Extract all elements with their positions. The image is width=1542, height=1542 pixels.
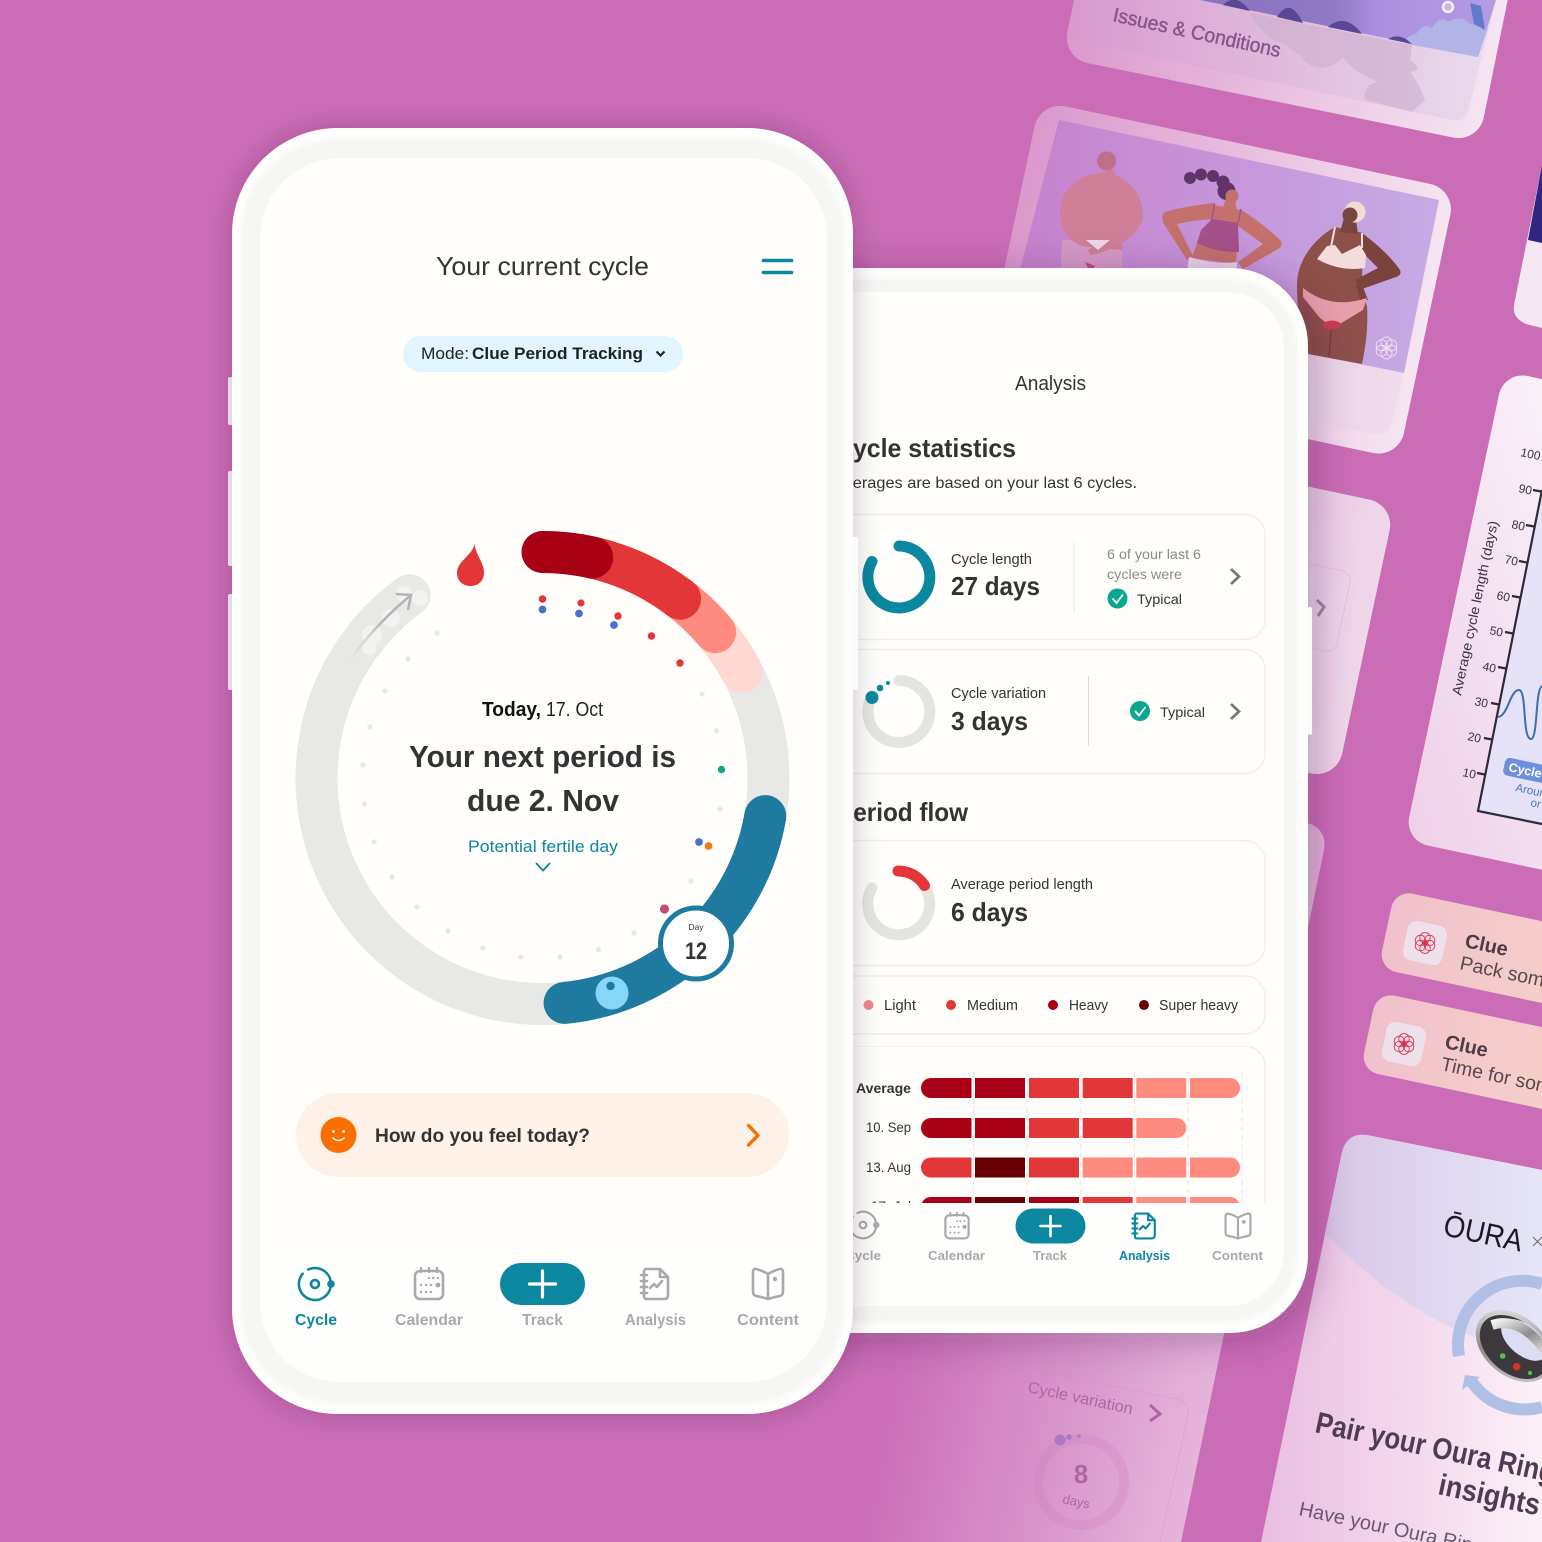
icon: oura ring	[1462, 1295, 1542, 1397]
row: 13 aug	[866, 1158, 1240, 1178]
notification title: Clue	[1443, 1031, 1490, 1062]
label: around: or	[1529, 797, 1542, 811]
nav: content	[737, 1269, 799, 1329]
card: behind right phone	[926, 418, 1395, 779]
feeling card: How do you feel today?	[375, 1125, 590, 1147]
label: around	[1514, 782, 1542, 811]
nav: content: Content	[1212, 1249, 1264, 1263]
card: average period length	[800, 840, 1265, 966]
fertile label: Potential fertile day	[468, 837, 619, 856]
nav: analysis	[1119, 1214, 1170, 1263]
day marker	[660, 908, 732, 979]
label: cycle pill	[1502, 757, 1542, 793]
row: 13 aug: 13. Aug	[866, 1159, 911, 1175]
symptom dots	[539, 595, 725, 914]
ovulation dot	[596, 976, 628, 1010]
nav: track: Track	[1033, 1249, 1067, 1263]
nav: calendar	[395, 1268, 463, 1329]
date: 17. Oct	[546, 699, 603, 721]
note: cycles were	[1107, 566, 1182, 582]
status: Typical	[1137, 591, 1182, 607]
card: body illustration	[983, 101, 1456, 458]
figure: left person	[1060, 152, 1143, 285]
status: Typical	[1160, 704, 1205, 720]
phone: analysis screen	[843, 251, 1338, 1362]
chart: period flow bars	[853, 1046, 1266, 1203]
label: Cycle variation	[951, 686, 1046, 702]
date: Today,	[482, 699, 541, 721]
row: average	[856, 1078, 1240, 1098]
phone frame	[232, 128, 853, 1414]
nav: track	[1016, 1208, 1086, 1263]
axis labels: 100	[1519, 445, 1542, 463]
nav: track: Track	[522, 1312, 563, 1329]
day marker: Day	[688, 922, 704, 932]
card: cycle length chart	[1404, 371, 1542, 903]
feeling card	[296, 1093, 789, 1177]
value: 8 days: days	[1061, 1491, 1092, 1512]
heading: period flow: Period flow	[837, 797, 969, 827]
notification: time for something	[1360, 992, 1542, 1133]
label: Average period length	[951, 877, 1093, 893]
card: cycle variation	[800, 650, 1265, 774]
icon: chevron down	[536, 863, 550, 870]
label: Cycle length	[951, 552, 1032, 568]
note: 6 of your last 6	[1107, 546, 1201, 562]
axis labels: 60	[1495, 588, 1512, 605]
icon: check	[1108, 588, 1128, 608]
axis title: Average cycle length (days)	[1449, 519, 1501, 697]
figure: right person	[1297, 202, 1400, 364]
day tick dots	[360, 630, 723, 960]
icon: clue	[1401, 919, 1449, 967]
card: right-edge dark top	[1514, 165, 1542, 328]
prediction headline: due 2. Nov	[467, 783, 620, 818]
axis labels: 70	[1503, 552, 1520, 569]
mode pill: Mode:	[421, 344, 469, 363]
title: Your current cycle	[436, 251, 649, 281]
label: cycle variation: Cycle variation	[1026, 1379, 1134, 1418]
axis labels: 10	[1461, 765, 1478, 782]
row: 10 sep: 10. Sep	[866, 1119, 911, 1135]
notification: pack something	[1378, 890, 1542, 1031]
icon: sync arrows	[1458, 1281, 1542, 1409]
date	[482, 699, 603, 721]
icon: menu	[764, 260, 792, 272]
nav: calendar	[928, 1213, 985, 1263]
row: 10 sep	[866, 1118, 1186, 1138]
nav: content	[1212, 1213, 1264, 1263]
title: analysis: Analysis	[1015, 373, 1086, 395]
arrow in ring	[351, 586, 428, 659]
heading: cycle statistics: Cycle statistics	[835, 433, 1016, 463]
ring: cycle length	[868, 546, 930, 608]
line: cycle curve	[1498, 686, 1542, 739]
icon: blood drop	[457, 544, 484, 586]
logo: oura: ŌURA	[1441, 1208, 1526, 1259]
chevron	[1231, 569, 1239, 584]
nav: calendar: Calendar	[395, 1312, 463, 1329]
icon: check	[1130, 701, 1150, 721]
nav: content: Content	[737, 1312, 799, 1329]
axis labels: 40	[1481, 659, 1498, 676]
phone: cycle screen	[228, 128, 858, 1414]
card: oura pairing	[1261, 1135, 1542, 1542]
icon: smiley	[320, 1117, 356, 1153]
legend: flow: Super heavy	[1159, 998, 1239, 1014]
axis labels: 80	[1510, 517, 1527, 534]
mode pill	[403, 336, 683, 372]
mode pill: Clue Period Tracking	[472, 344, 643, 363]
prediction headline: Your next period is	[409, 739, 676, 774]
nav: analysis: Analysis	[1119, 1249, 1170, 1263]
side buttons	[228, 377, 233, 690]
value: 3 days	[951, 706, 1028, 736]
note	[1107, 546, 1201, 582]
icon: chevron	[748, 1126, 758, 1145]
card: cycle length	[800, 514, 1265, 640]
phone frame	[680, 268, 1308, 1333]
cycle ring	[316, 544, 768, 1010]
nav: cycle	[295, 1268, 337, 1329]
row: average: Average	[856, 1080, 911, 1096]
nav: analysis: Analysis	[625, 1312, 686, 1329]
legend: flow: Heavy	[1069, 998, 1109, 1014]
nav: track	[500, 1263, 585, 1329]
row: 17 jul	[872, 1197, 1240, 1203]
value: 8 days: 8	[1074, 1459, 1088, 1489]
axis labels	[1461, 445, 1542, 782]
card: issues and conditions	[1062, 0, 1528, 143]
nav bar: cycle screen	[260, 1258, 827, 1382]
legend: flow: Light	[884, 998, 916, 1014]
axis labels: 90	[1517, 481, 1534, 498]
nav bar: analysis screen	[800, 1203, 1284, 1306]
nav: calendar: Calendar	[928, 1249, 985, 1263]
nav: cycle: Cycle	[295, 1312, 337, 1329]
legend: flow: Medium	[967, 998, 1018, 1014]
ring: period	[868, 871, 930, 935]
period arcs	[542, 552, 742, 672]
ring: cycle variation	[866, 680, 930, 742]
nav: cycle: Cycle	[845, 1249, 881, 1263]
figure: middle person	[1162, 168, 1282, 280]
icon: clue flower mark	[1376, 337, 1397, 359]
value: 8 days	[1061, 1459, 1092, 1512]
row: 17 jul: 17. Jul	[871, 1198, 911, 1214]
chevron	[1231, 704, 1239, 719]
nav: analysis	[625, 1269, 686, 1329]
icon: clue	[1380, 1020, 1428, 1068]
ring track	[316, 595, 768, 1004]
card: cycle variation faded	[760, 722, 1324, 1542]
heading: issues and conditions: Issues & Conditions	[1111, 4, 1283, 62]
prediction headline	[409, 739, 676, 818]
label: cycle pill: Cycle	[1507, 760, 1542, 781]
notification title: Clue	[1463, 930, 1510, 961]
axis labels: 50	[1488, 623, 1505, 640]
value: 6 days	[951, 897, 1028, 927]
axis labels: 30	[1473, 694, 1490, 711]
value: 27 days	[951, 571, 1040, 601]
nav: cycle	[845, 1212, 881, 1263]
legend: flow	[800, 976, 1265, 1034]
day marker: 12	[685, 938, 707, 965]
axis labels: 20	[1466, 729, 1483, 746]
fertile arc	[565, 816, 765, 1003]
subheading: Averages are based on your last 6 cycles.	[834, 475, 1137, 492]
